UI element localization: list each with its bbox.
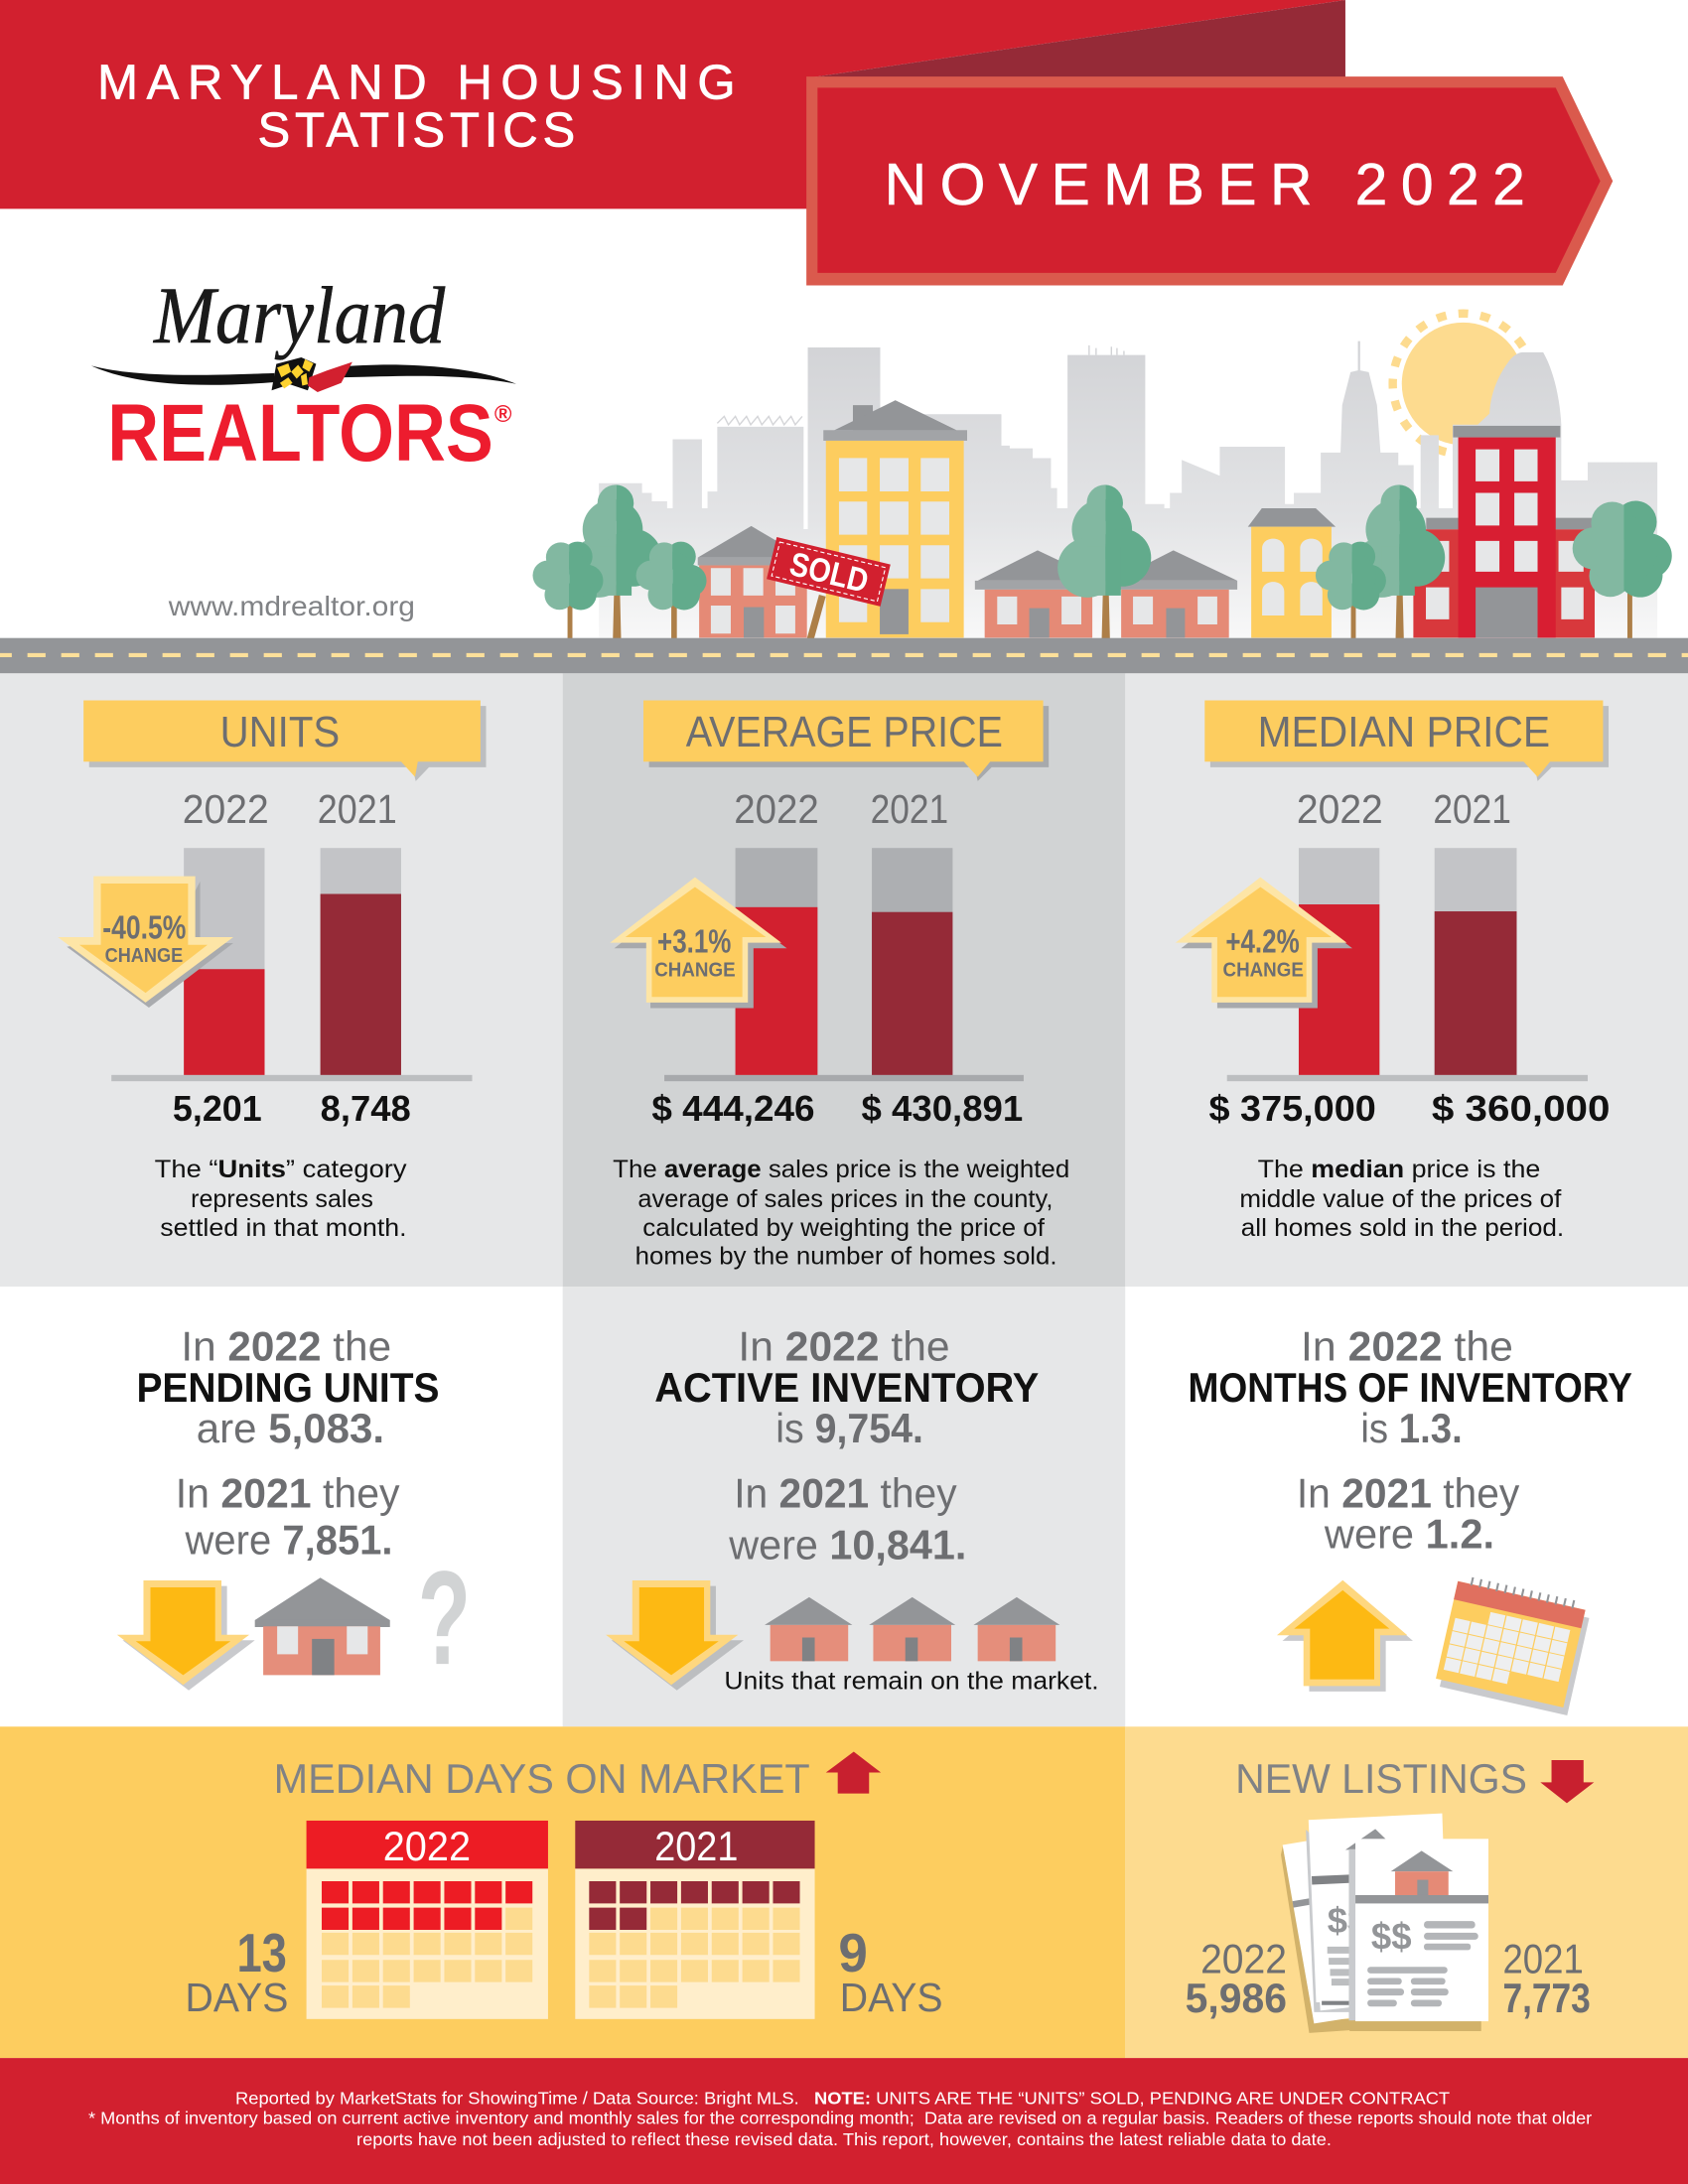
heading: average price [643,701,1049,781]
chart: average price bars: $ 444,246 [651,1088,815,1129]
stat: 9 days: DAYS [840,1975,943,2020]
text: months of inventory [1188,1322,1632,1558]
icon: calendar [1435,1574,1593,1715]
logo: Maryland Realtors [91,271,516,478]
calendar: 2022: 2022 [383,1823,471,1869]
text: pending units: were 7,851. [185,1516,393,1563]
chart: average price bars: $ 430,891 [862,1088,1023,1129]
panel: months of inventory [1125,1287,1688,1726]
heading: median price: MEDIAN PRICE [1258,709,1550,756]
red building [1413,426,1595,637]
heading: new listings: NEW LISTINGS [1235,1755,1527,1802]
panel: average price [610,701,1069,1271]
text: months of inventory: were 1.2. [1324,1511,1494,1558]
description: units: The “ Units ” category [155,1156,407,1183]
icon: red down arrow [1540,1760,1594,1803]
website: www.mdrealtor.org [168,591,415,621]
calendar: 2022 [307,1821,548,2019]
stat: 13 days: DAYS [186,1975,288,2020]
chart: units bars [111,786,472,1129]
arrow: units change [58,877,233,1008]
text: months of inventory: In 2021 they [1297,1469,1519,1516]
arrow: median price change: CHANGE [1223,959,1304,981]
icon: up arrow [1277,1580,1413,1692]
footer: reports have not been adjusted to reflect these revised data. This report, however, contains the latest reliable data to date. [356,2129,1332,2149]
trees [533,484,1672,642]
panel: median price [1176,701,1610,1242]
text: active inventory: were 10,841. [728,1521,966,1568]
pink house with sign [698,526,807,637]
stat: 2021 listings: 2021 [1502,1936,1584,1982]
icon: red up arrow [826,1752,881,1794]
icon: listing papers: $$ [1328,1900,1367,1941]
description: average price: homes by the number of homes sold. [635,1243,1057,1271]
stat: 13 days: 13 [236,1922,287,1983]
text: pending units: In 2022 the [181,1322,391,1369]
text: months of inventory: MONTHS OF INVENTORY [1188,1364,1632,1411]
icon: down arrow [606,1580,744,1691]
icon: three houses [765,1597,1059,1661]
stat: 13 days [186,1922,288,2020]
text: pending units: PENDING UNITS [136,1364,440,1411]
arrow: median price change [1176,878,1352,1009]
chart: median price bars: $ 360,000 [1432,1088,1610,1129]
logo: Maryland Realtors: REALTORS [107,388,493,478]
icon: house [255,1577,390,1675]
yellow apartment building [823,400,967,637]
chart: median price bars: $ 375,000 [1208,1088,1376,1129]
text: active inventory [654,1322,1039,1568]
text: pending units [136,1322,440,1563]
sold sign [767,537,891,643]
arrow: units change: CHANGE [105,945,183,967]
stat: 2022 listings: 2022 [1200,1936,1287,1982]
text: pending units: In 2021 they [176,1469,400,1516]
road [0,638,1688,673]
heading: average price: AVERAGE PRICE [686,709,1003,756]
arrow: median price change: +4.2% [1225,923,1300,960]
description: median price [1239,1156,1564,1242]
panel: units [58,701,487,1242]
title [97,57,736,157]
heading: units [83,701,487,781]
stat: 2022 listings: 5,986 [1186,1975,1287,2021]
description: median price: The median price is the [1258,1156,1540,1183]
chart: median price bars: 2021 [1433,786,1511,832]
description: average price: calculated by weighting the price of [642,1214,1046,1242]
heading: units: UNITS [220,709,340,756]
text: active inventory: is 9,754. [775,1405,923,1451]
header banner [0,0,1345,208]
stat: 2021 listings: 7,773 [1502,1975,1591,2021]
icon: listing papers: $$ [1371,1917,1412,1959]
city skyline [599,341,1657,637]
date ribbon: NOVEMBER 2022 [885,153,1525,217]
arrow: average price change: +3.1% [657,923,731,960]
chart: units bars: 8,748 [321,1088,411,1129]
icon: listing papers [1281,1814,1488,2033]
description: units: settled in that month. [160,1214,407,1242]
description: average price: The average sales price is the weighted [613,1156,1069,1183]
icon: down arrow [117,1580,255,1691]
stat: 9 days [838,1922,943,2020]
description: median price: middle value of the prices of [1239,1185,1562,1213]
logo: Maryland Realtors: Maryland [153,271,445,360]
stat: 2022 listings [1186,1936,1287,2021]
description: units [155,1156,407,1242]
sun [1388,309,1538,459]
chart: median price bars [1208,786,1610,1129]
panel: new listings [1125,1726,1688,2058]
sold sign: SOLD [786,546,872,601]
description: average price: average of sales prices in the county, [637,1185,1053,1213]
heading: median price [1204,701,1609,781]
footer: * Months of inventory based on current active inventory and monthly sales for the corresponding month; Data are revised on a regular basis. Readers of these reports should note that older [88,2109,1592,2128]
description: units: represents sales [191,1185,373,1213]
arrow: average price change [610,878,786,1009]
panel: median days on market [0,1726,1125,2058]
text: active inventory: In 2022 the [738,1322,950,1369]
stat: 9 days: 9 [838,1922,868,1983]
description: average price [613,1156,1069,1271]
logo: Maryland Realtors: ® [494,401,512,428]
panel: pending units [0,1287,563,1726]
title: STATISTICS [257,103,575,157]
text: months of inventory: is 1.3. [1360,1405,1463,1451]
caption: units on market: Units that remain on the market. [724,1667,1099,1695]
chart: units bars: 2022 [183,786,269,832]
calendar: 2021 [575,1821,815,2019]
arrow: average price change: CHANGE [654,959,736,981]
chart: average price bars [651,786,1024,1129]
chart: units bars: 2021 [318,786,397,832]
text: active inventory: In 2021 they [734,1469,957,1516]
stat: 2021 listings [1502,1936,1591,2021]
date ribbon [806,76,1613,286]
heading: median days on market: MEDIAN DAYS ON MARKET [274,1755,810,1802]
arrow: units change: -40.5% [102,909,186,946]
text: active inventory: ACTIVE INVENTORY [654,1364,1039,1411]
footer: Reported by MarketStats for ShowingTime / Data Source: Bright MLS. NOTE: UNITS ARE THE “UNITS” SOLD, PENDING ARE UNDER CONTRACT [235,2088,1450,2108]
text: months of inventory: In 2022 the [1301,1322,1513,1369]
text: pending units: are 5,083. [197,1405,384,1451]
chart: units bars: 5,201 [173,1088,262,1129]
chart: median price bars: 2022 [1297,786,1383,832]
pair of pink houses [975,550,1237,637]
chart: average price bars: 2022 [734,786,819,832]
chart: average price bars: 2021 [871,786,948,832]
footer [0,2058,1688,2184]
small yellow building [1248,508,1336,637]
calendar: 2021: 2021 [654,1823,738,1869]
panel backgrounds: top row [0,673,1688,1287]
panel: active inventory [563,1287,1125,1726]
icon: question mark: ? [418,1543,471,1693]
description: median price: all homes sold in the period. [1241,1214,1564,1242]
title: MARYLAND HOUSING [97,57,736,110]
